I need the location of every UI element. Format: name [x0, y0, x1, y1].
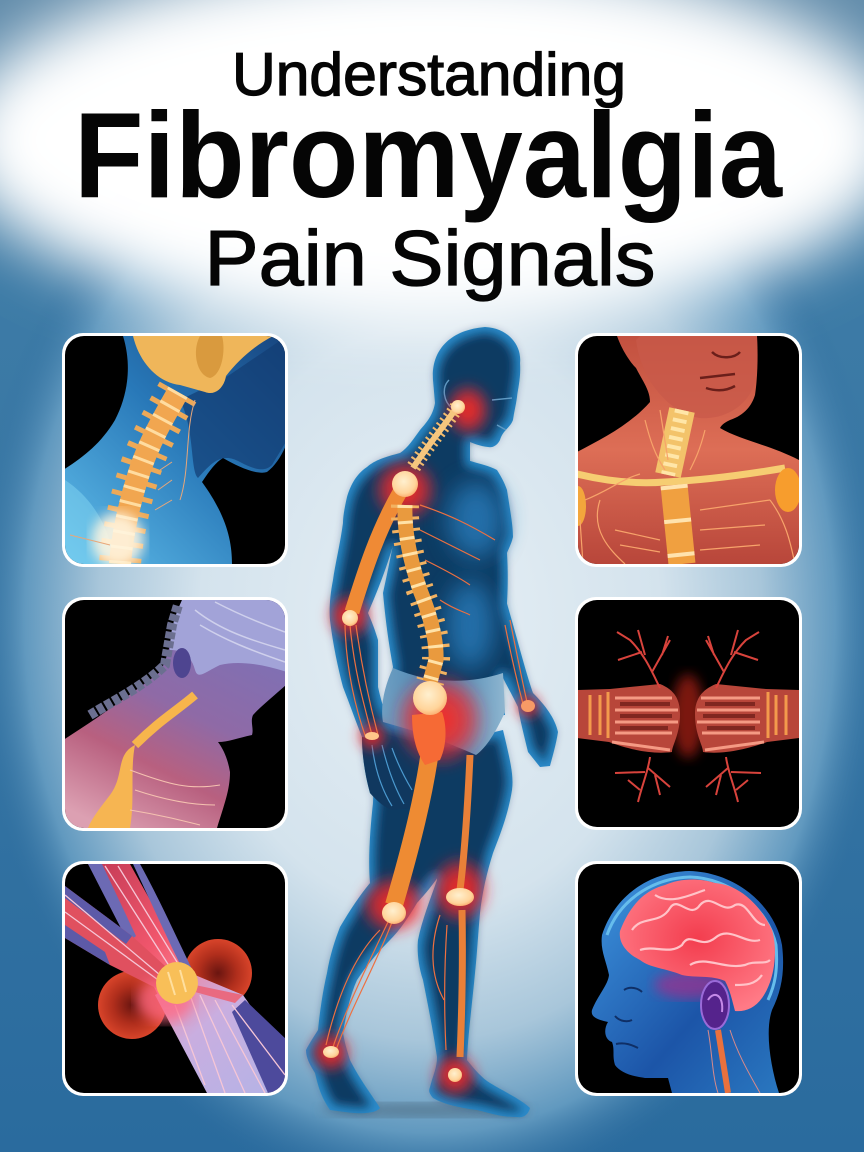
figure: pain glows [309, 382, 542, 1099]
panel: two hands with red nerve branches [575, 597, 802, 830]
panel: shoulder and neck, purple side view [60, 597, 288, 831]
figure: far arm [500, 590, 558, 767]
title line: Pain Signals: Pain Signals [204, 214, 656, 302]
figure: head and neck [398, 327, 520, 475]
panel: neck and spine, blue side view [60, 333, 288, 568]
title [74, 41, 783, 302]
figure: near hand [362, 737, 417, 810]
title line: Fibromyalgia: Fibromyalgia [74, 87, 783, 223]
figure ground shadow [320, 1103, 530, 1117]
figure: face details [444, 380, 512, 430]
title line: Understanding: Understanding [232, 41, 626, 108]
figure: leg nerve band [394, 735, 432, 905]
panel: glowing brain in blue head [575, 861, 802, 1096]
figure: chest and abdomen highlights [446, 482, 504, 669]
left hand [577, 684, 680, 753]
figure: back leg nerve band [460, 755, 470, 1057]
panel: inflamed muscle with glowing joint [62, 861, 288, 1096]
figure: nerve lines [326, 505, 527, 1050]
figure: torso [383, 453, 513, 720]
figure: spine [405, 407, 457, 682]
figure: front leg [306, 720, 470, 1113]
right hand [695, 684, 799, 753]
figure: body silhouette [306, 327, 558, 1117]
figure: joint markers [323, 400, 535, 1082]
central human figure [306, 327, 558, 1117]
panel: neck and collarbones, red front view [570, 333, 802, 567]
figure: hand finger lines [372, 745, 412, 806]
figure: back leg [418, 730, 530, 1117]
figure: arm nerve band [352, 492, 400, 612]
figure: briefs [382, 668, 505, 755]
figure: near arm [330, 453, 420, 810]
